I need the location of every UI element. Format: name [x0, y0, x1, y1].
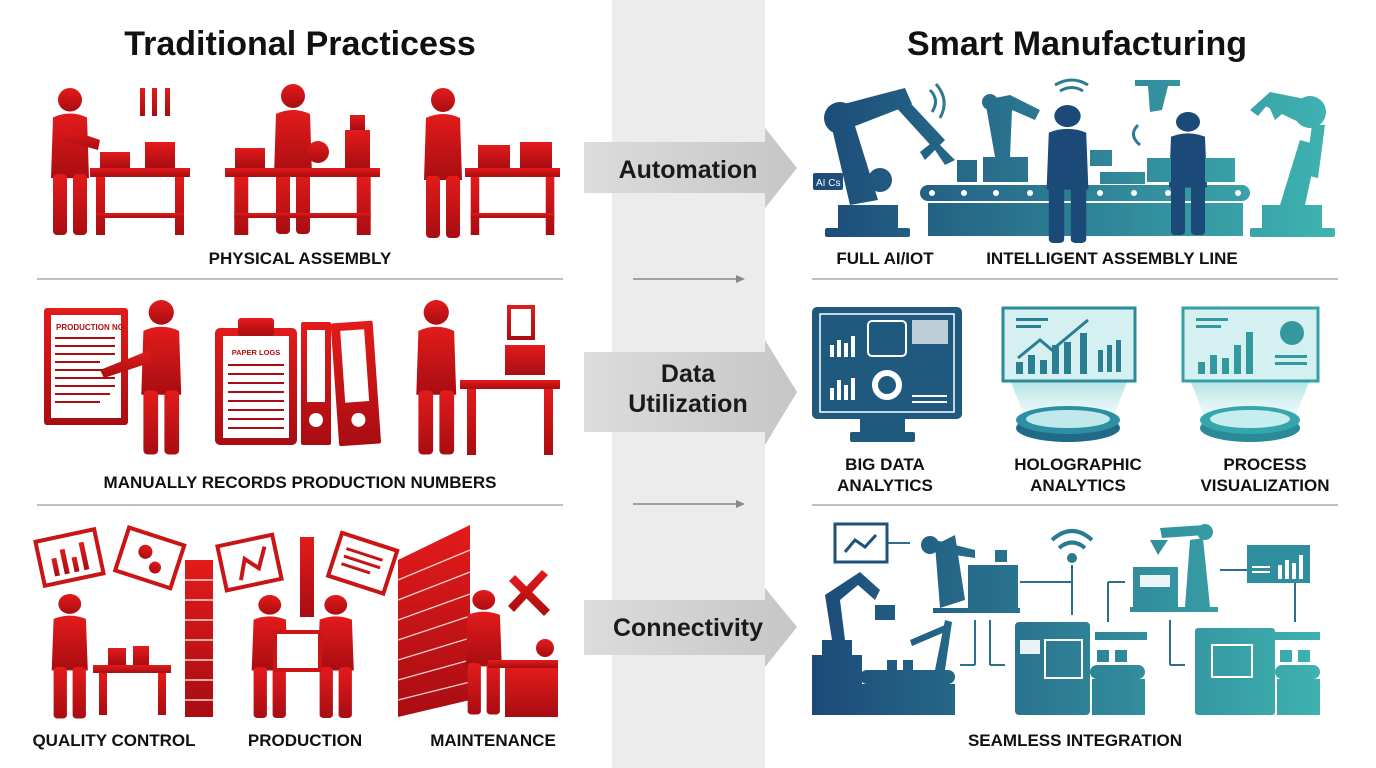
icon: holographic analytics	[1003, 308, 1135, 442]
arrow: connectivity	[584, 588, 797, 667]
icon: clipboard paper logs	[215, 318, 297, 445]
labels: analytics: BIG DATA	[845, 455, 925, 474]
arrow: small connector 2	[633, 500, 745, 508]
icon: document	[44, 308, 128, 425]
label: physical assembly: PHYSICAL ASSEMBLY	[209, 249, 392, 268]
icon: left robot line	[812, 572, 955, 715]
icon: big data monitor	[812, 307, 962, 442]
labels: row1 right: FULL AI/IOT	[836, 249, 934, 268]
icon: robot arm left	[813, 88, 955, 237]
panel: intelligent assembly line	[813, 80, 1335, 243]
icon: production	[217, 533, 397, 718]
icon: conveyor with workers	[920, 80, 1250, 243]
icon: robot arm right	[1250, 92, 1335, 237]
icon: process visualization	[1183, 308, 1318, 442]
arrow: automation	[584, 128, 797, 208]
panel: manual records	[44, 300, 560, 455]
panel: seamless integration	[812, 524, 1320, 715]
labels: silos	[32, 731, 556, 750]
icon: upper robot machine	[921, 535, 1020, 613]
panel: physical assembly	[51, 84, 560, 238]
labels: row1 right: INTELLIGENT ASSEMBLY LINE	[986, 249, 1238, 268]
arrow: data utilization: Utilization	[628, 390, 748, 418]
icon: wifi	[1052, 531, 1092, 561]
icon: worker with wrench	[51, 88, 190, 235]
icon: maintenance	[398, 525, 558, 717]
icon: brick pillar	[185, 560, 213, 717]
arrow: automation: Automation	[619, 156, 757, 184]
panel: silos	[35, 525, 558, 718]
title: traditional: Traditional Practicess	[124, 25, 476, 63]
arrow: connectivity: Connectivity	[613, 614, 763, 642]
icon: binders	[301, 321, 381, 446]
icon: worker at bench	[225, 84, 380, 235]
icon: chart panel	[835, 524, 887, 562]
labels: analytics: ANALYTICS	[837, 476, 933, 495]
icon: robot arm left: AI Cs	[816, 178, 840, 189]
labels: analytics: HOLOGRAPHIC	[1014, 455, 1142, 474]
arrow: data utilization: Data	[661, 360, 716, 388]
labels: silos: PRODUCTION	[248, 731, 362, 750]
icon: right machine	[1195, 628, 1320, 715]
labels: row1 right	[836, 249, 1238, 268]
arrow: small connector 1	[633, 275, 745, 283]
labels: analytics: VISUALIZATION	[1200, 476, 1330, 495]
panel: analytics	[812, 307, 1318, 442]
title: smart: Smart Manufacturing	[907, 25, 1247, 63]
icon: worker at desk	[416, 300, 560, 455]
icon: upper right robot machine	[1130, 524, 1218, 612]
icon: writing worker	[100, 300, 181, 454]
icon: document: PRODUCTION NG	[56, 323, 124, 332]
center gray band	[612, 0, 765, 768]
icon: quality control	[35, 528, 184, 718]
labels: analytics: ANALYTICS	[1030, 476, 1126, 495]
label: seamless integration: SEAMLESS INTEGRATION	[968, 731, 1182, 750]
icon: right chart panel	[1247, 545, 1310, 583]
label: manual records: MANUALLY RECORDS PRODUCTION NUMBERS	[104, 473, 496, 492]
icon: worker at table	[424, 88, 560, 238]
icon: clipboard paper logs: PAPER LOGS	[232, 348, 280, 357]
labels: analytics	[837, 455, 1330, 495]
connection lines	[887, 543, 1295, 665]
icon: central machine	[1015, 622, 1147, 715]
labels: silos: QUALITY CONTROL	[32, 731, 196, 750]
arrow: data utilization	[584, 340, 797, 445]
labels: silos: MAINTENANCE	[430, 731, 556, 750]
icon: wifi signals	[930, 80, 1140, 145]
labels: analytics: PROCESS	[1223, 455, 1307, 474]
